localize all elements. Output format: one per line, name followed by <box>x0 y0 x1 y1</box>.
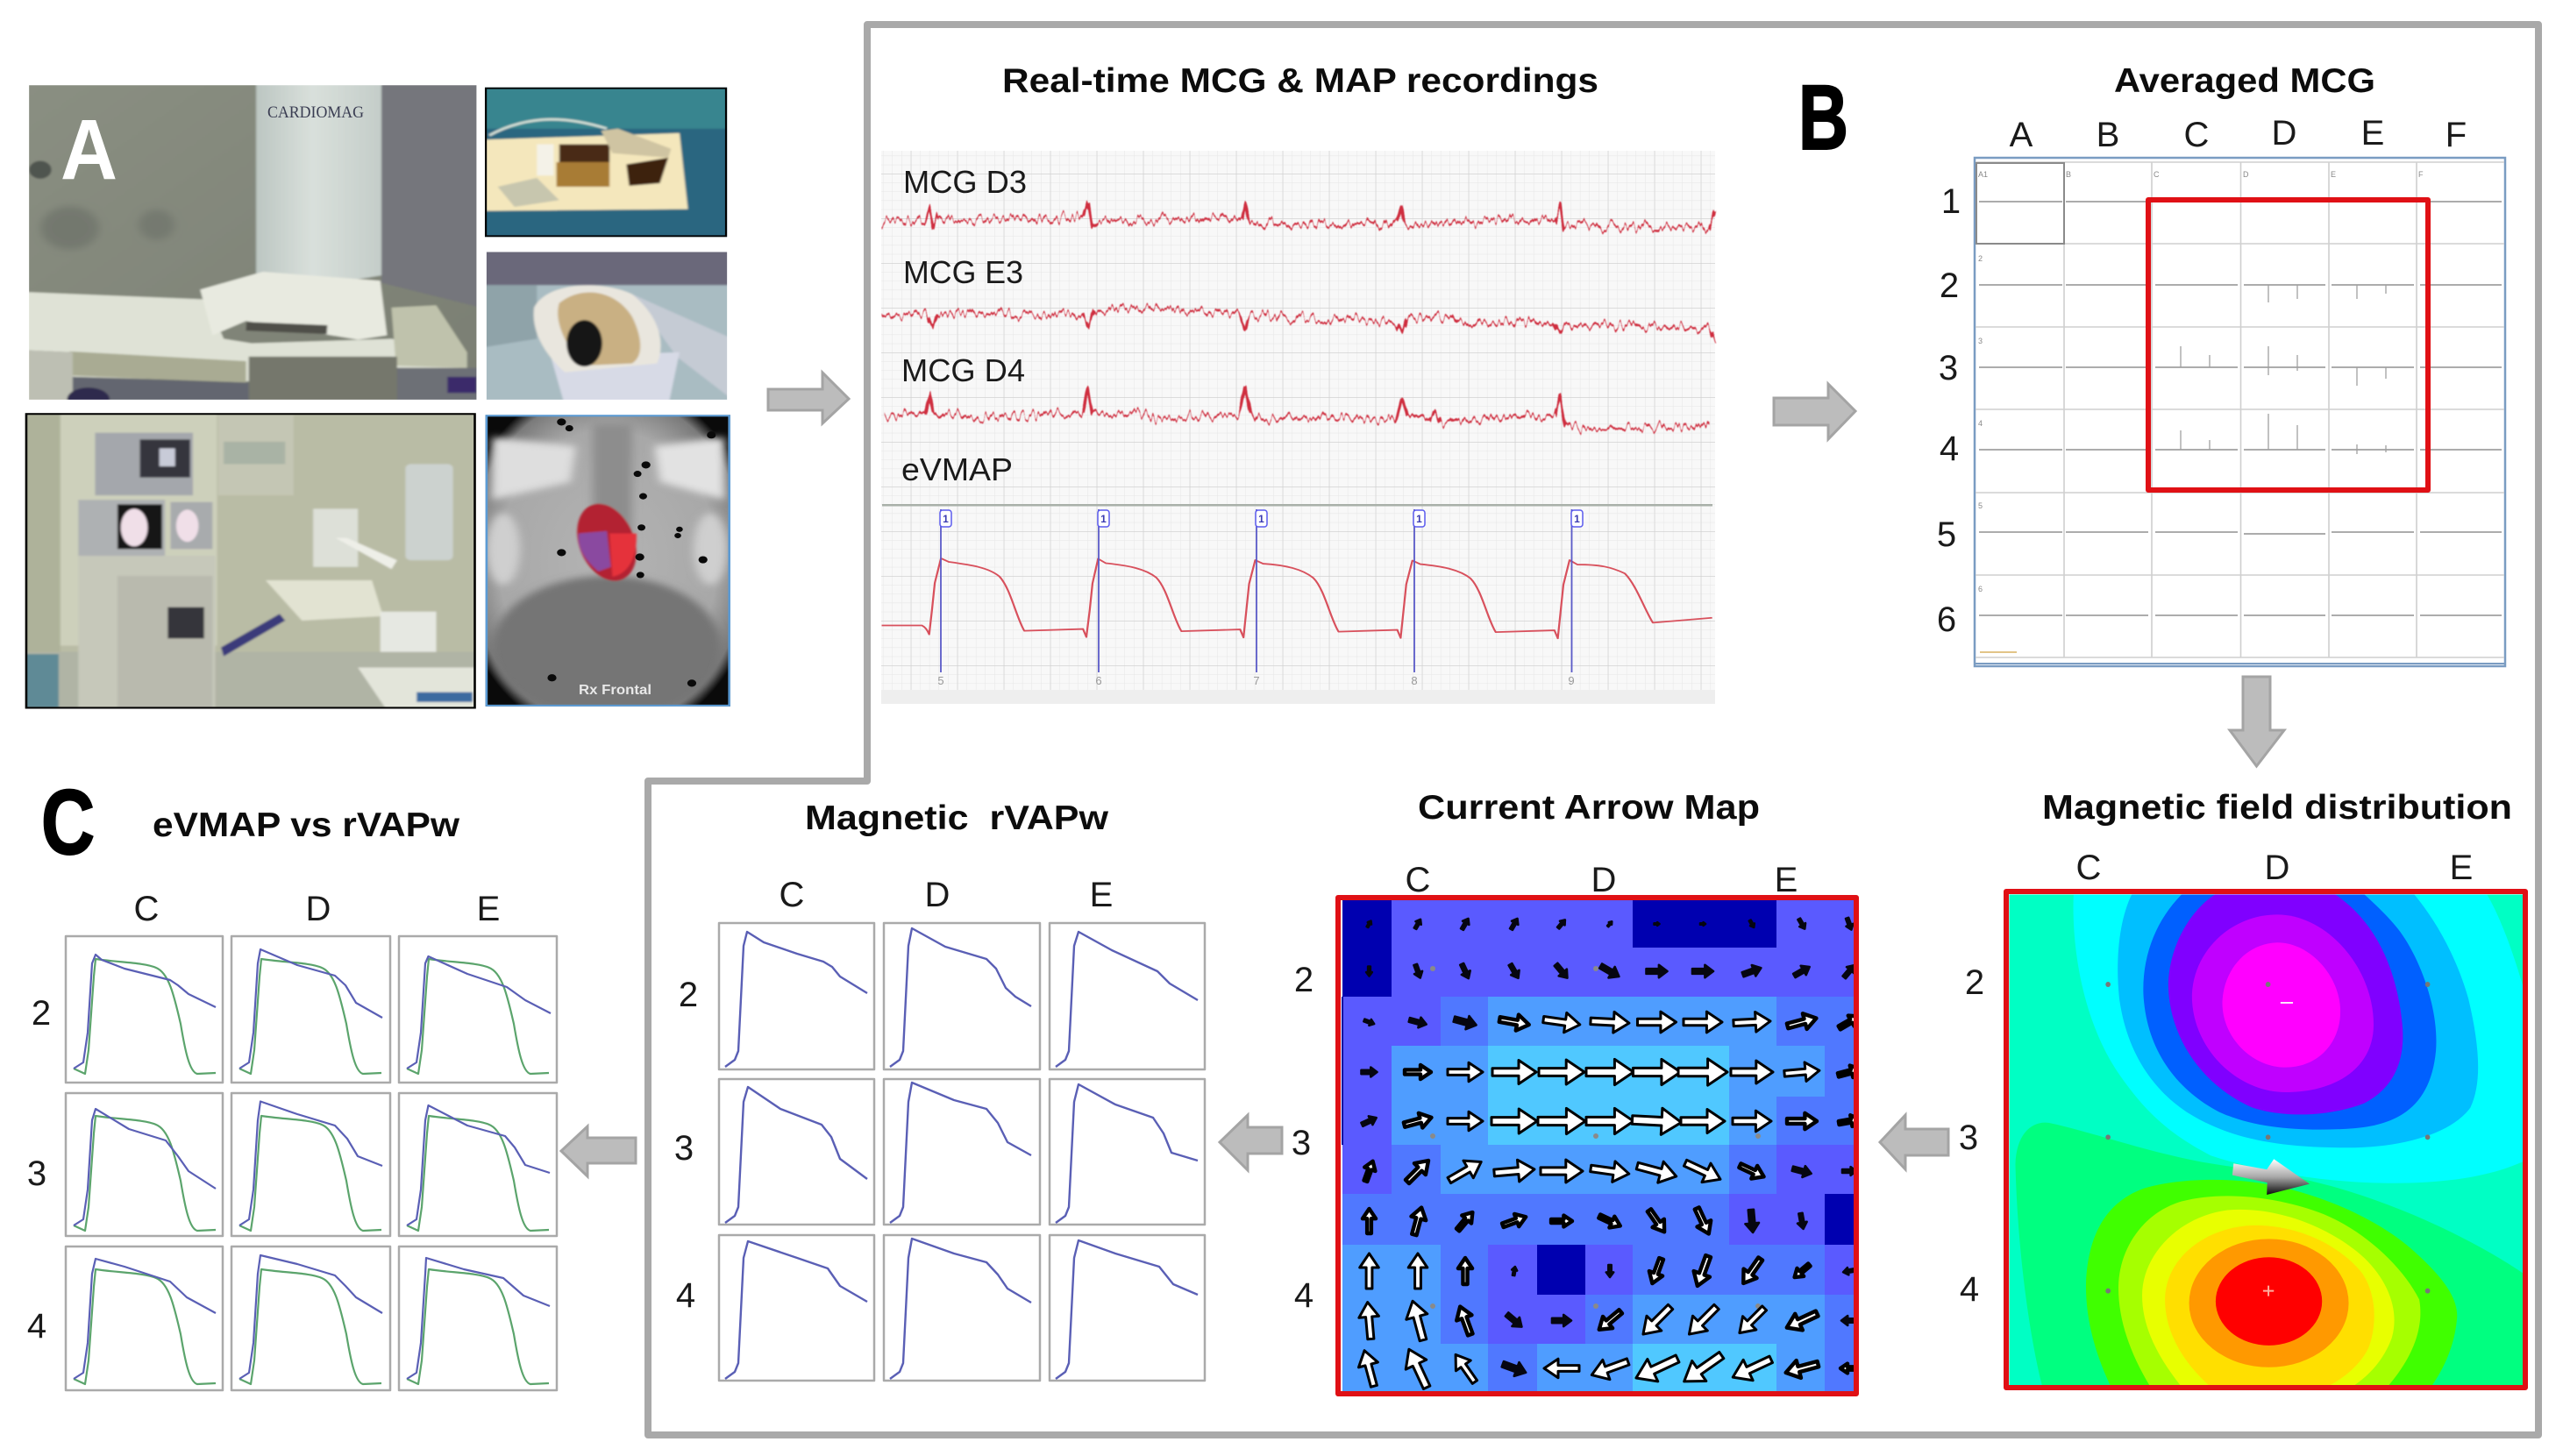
chart: overlay D2 <box>231 936 390 1083</box>
markers: beat markers 5 to 9: 1 <box>1258 513 1264 525</box>
row labels: comparison <box>27 994 51 1346</box>
chart: averaged MCG grid: B <box>2066 170 2071 179</box>
chart: magnetic field contour map <box>2006 891 2526 1388</box>
arrow: magnetic field to current map <box>1880 1115 1948 1169</box>
column labels: current map: C <box>1406 861 1430 899</box>
column labels: rVAPw: D <box>925 876 950 914</box>
chart: real-time MCG and MAP traces <box>881 151 1715 704</box>
row labels: rVAPw: 4 <box>676 1276 695 1315</box>
row labels: comparison: 2 <box>32 994 51 1033</box>
label: eVMAP: eVMAP <box>901 451 1013 487</box>
label: MCG D4: MCG D4 <box>901 352 1025 388</box>
markers: beat markers 5 to 9: 1 <box>943 513 949 525</box>
column labels: rVAPw: C <box>780 876 804 914</box>
traces: MCG D3, E3, D4 <box>882 202 1715 429</box>
photo: specimen on board <box>481 84 733 240</box>
column labels: current map <box>1406 861 1798 899</box>
row labels: current map <box>1292 961 1314 1315</box>
chart: averaged MCG grid: 4 <box>1978 419 1983 428</box>
column labels A to F: E <box>2361 114 2384 153</box>
column labels: magnetic field: C <box>2076 849 2101 887</box>
chart: rVAPw D2 <box>884 923 1040 1069</box>
column labels: comparison <box>134 890 500 928</box>
column labels A to F: D <box>2272 114 2296 153</box>
column labels A to F: C <box>2184 116 2209 154</box>
row labels 1 to 6: 6 <box>1937 600 1956 639</box>
title: eVMAP vs rVAPw: eVMAP vs rVAPw <box>153 806 460 844</box>
title: magnetic rVAPw: Magnetic rVAPw <box>805 799 1109 837</box>
trace: eVMAP action potentials <box>882 558 1712 638</box>
chart: rVAPw E2 <box>1050 923 1205 1069</box>
markers: beat markers 5 to 9: 6 <box>1095 674 1102 687</box>
label: CardioMag on scanner: CARDIOMAG <box>267 103 364 122</box>
column labels: magnetic field: E <box>2450 849 2473 887</box>
column labels A to F <box>2010 114 2467 154</box>
label: Rx Frontal: Rx Frontal <box>579 683 651 698</box>
chart: overlay E3 <box>399 1093 557 1236</box>
photo: catheterization lab <box>23 410 481 714</box>
column labels: magnetic field: D <box>2265 849 2289 887</box>
column labels: comparison: C <box>134 890 159 928</box>
chart: rVAPw D3 <box>884 1079 1040 1225</box>
markers: beat markers 5 to 9: 1 <box>1416 513 1422 525</box>
icon: mean current vector arrow <box>2232 1159 2310 1195</box>
row labels: comparison: 3 <box>27 1154 46 1193</box>
column labels A to F: A <box>2010 116 2033 154</box>
row labels: current map: 2 <box>1294 961 1314 999</box>
chart: averaged MCG grid: C <box>2154 170 2160 179</box>
chart: overlay C3 <box>66 1093 223 1236</box>
row labels: current map: 4 <box>1294 1276 1314 1315</box>
row labels: current map: 3 <box>1292 1124 1311 1162</box>
markers: beat markers 5 to 9: 9 <box>1568 674 1575 687</box>
row labels: magnetic field <box>1959 963 1984 1309</box>
panel A: acquisition photos <box>23 80 733 719</box>
row labels 1 to 6: 3 <box>1939 349 1958 387</box>
chart: averaged MCG grid: 5 <box>1978 501 1983 510</box>
column labels: current map: D <box>1591 861 1616 899</box>
row labels 1 to 6: 1 <box>1941 182 1961 221</box>
chart: current arrow map <box>1338 898 1862 1394</box>
heat cells <box>1342 900 1855 1391</box>
markers: beat markers 5 to 9: 5 <box>937 674 944 687</box>
chart: averaged MCG grid <box>1937 114 2505 666</box>
chart: rVAPw C2 <box>719 923 874 1069</box>
row labels 1 to 6 <box>1937 182 1961 639</box>
chart: averaged MCG grid: E <box>2331 170 2336 179</box>
row labels: rVAPw: 2 <box>679 976 698 1014</box>
row labels: rVAPw <box>674 976 698 1315</box>
chart grid: magnetic rVAPw waveforms <box>719 923 1205 1381</box>
column labels: rVAPw <box>780 876 1113 914</box>
arrow: recordings to averaged MCG <box>1774 384 1855 439</box>
title: averaged MCG: Averaged MCG <box>2114 62 2375 100</box>
row labels: rVAPw: 3 <box>674 1129 694 1168</box>
chart: rVAPw C4 <box>719 1235 874 1381</box>
arrow: averaged MCG to magnetic field <box>2230 677 2284 766</box>
chart: averaged MCG grid: A1 <box>1978 170 1988 179</box>
chart: overlay E4 <box>399 1246 557 1390</box>
label: MCG D3: MCG D3 <box>903 164 1027 200</box>
label: MCG E3: MCG E3 <box>903 254 1023 290</box>
chart: overlay D3 <box>231 1093 390 1236</box>
photo: specimen in container <box>481 249 733 406</box>
markers: beat markers 5 to 9 <box>937 509 1583 687</box>
markers: beat markers 5 to 9: 8 <box>1411 674 1418 687</box>
chart: averaged MCG grid: 6 <box>1978 585 1983 593</box>
panel outline: processing pipeline frame <box>648 25 2538 1435</box>
photo: CardioMag scanner room <box>23 80 487 411</box>
row labels: magnetic field: 4 <box>1960 1270 1979 1309</box>
current arrows <box>1355 917 1862 1392</box>
column labels: comparison: E <box>477 890 500 928</box>
column labels A to F: F <box>2446 116 2467 154</box>
chart grid: eVMAP vs rVAPw overlays <box>66 936 557 1390</box>
chart: rVAPw E3 <box>1050 1079 1205 1225</box>
markers: beat markers 5 to 9: 1 <box>1100 513 1107 525</box>
column labels: comparison: D <box>306 890 331 928</box>
markers: beat markers 5 to 9: 7 <box>1253 674 1260 687</box>
arrow: rVAPw to comparison <box>561 1126 636 1176</box>
chart: averaged MCG grid: F <box>2418 170 2424 179</box>
column labels: current map: E <box>1775 861 1798 899</box>
column labels: rVAPw: E <box>1090 876 1113 914</box>
markers: beat markers 5 to 9: 1 <box>1574 513 1580 525</box>
title: magnetic field distribution: Magnetic field distribution <box>2042 789 2512 827</box>
arrow: current map to rVAPw <box>1220 1115 1282 1170</box>
panel letter A: A <box>61 102 117 197</box>
chart: rVAPw D4 <box>884 1235 1040 1381</box>
highlight: red frame <box>1338 898 1856 1394</box>
chart: averaged MCG grid: 2 <box>1978 254 1983 263</box>
title: current arrow map: Current Arrow Map <box>1418 789 1760 827</box>
chart: averaged MCG grid: 3 <box>1978 337 1983 345</box>
chart: overlay D4 <box>231 1246 390 1390</box>
photo: frontal X-ray with heart model <box>486 415 730 719</box>
highlight: red frame <box>2006 891 2525 1388</box>
column labels: magnetic field <box>2076 849 2473 887</box>
column labels A to F: B <box>2097 116 2119 154</box>
chart: overlay C4 <box>66 1246 223 1390</box>
row labels 1 to 6: 5 <box>1937 515 1956 554</box>
chart: rVAPw C3 <box>719 1079 874 1225</box>
row labels: magnetic field: 3 <box>1959 1119 1978 1157</box>
chart: averaged MCG grid: D <box>2243 170 2249 179</box>
panel letter C: C <box>41 771 95 874</box>
panel letter B: B <box>1798 67 1848 169</box>
chart: overlay C2 <box>66 936 223 1083</box>
arrow: A to real-time recordings <box>768 373 849 423</box>
chart: overlay E2 <box>399 936 557 1083</box>
row labels 1 to 6: 2 <box>1940 266 1959 305</box>
highlight: selected sensors C-E, 2-4 <box>2148 200 2428 490</box>
row labels: comparison: 4 <box>27 1307 46 1346</box>
row labels 1 to 6: 4 <box>1940 430 1959 468</box>
title: real-time recordings: Real-time MCG & MAP recordings <box>1002 62 1598 100</box>
chart: rVAPw E4 <box>1050 1235 1205 1381</box>
row labels: magnetic field: 2 <box>1965 963 1984 1002</box>
